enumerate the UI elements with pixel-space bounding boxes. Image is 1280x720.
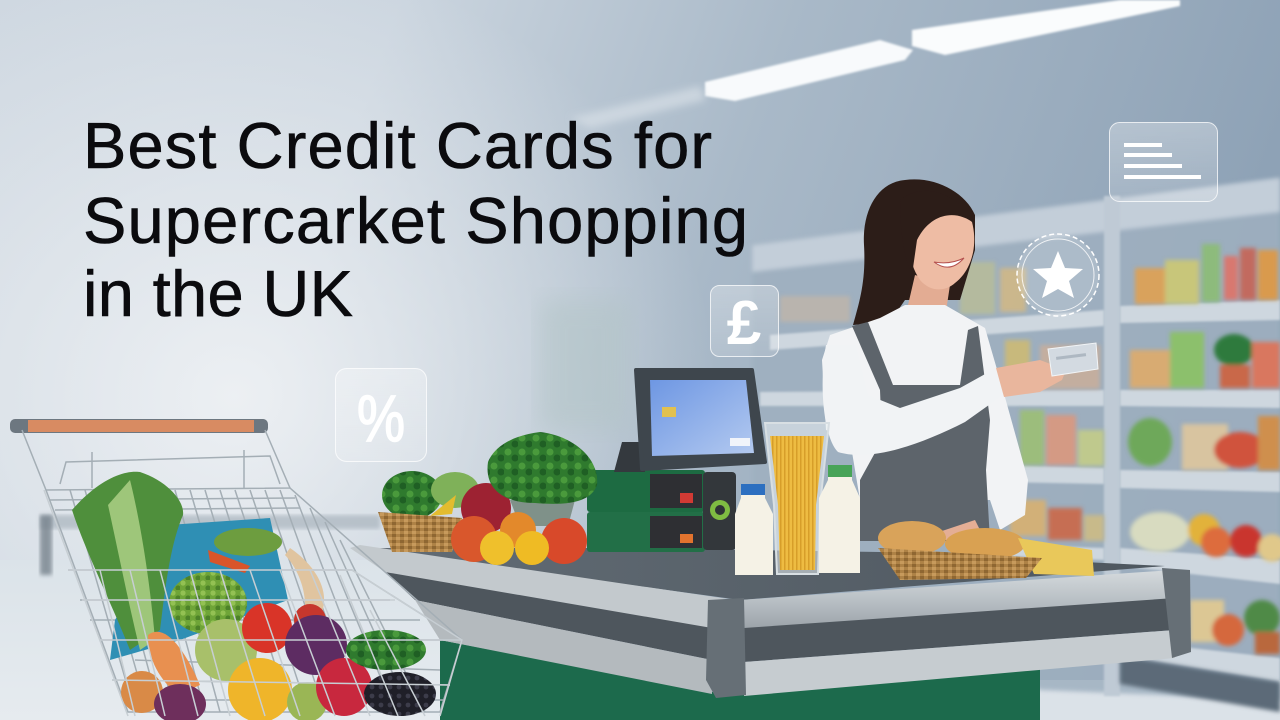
fringe: [900, 191, 975, 275]
icon: star seal: [1017, 234, 1099, 316]
hand: [996, 360, 1066, 397]
yellow pepper: [228, 658, 292, 720]
cart wire frame: [22, 430, 462, 712]
woman cashier: [822, 179, 1066, 541]
ceiling lights: [570, 0, 1180, 128]
icon: document lines badge: [1110, 122, 1218, 202]
title: Best Credit Cards for: [83, 109, 712, 182]
peppers and carrots: [214, 528, 282, 556]
tomatoes and peppers: [451, 516, 497, 562]
shelf boards: [760, 300, 1280, 682]
greens: [72, 472, 183, 650]
cart handle: [10, 419, 268, 433]
milk bottles and pasta jar: [735, 423, 860, 575]
reader base: [587, 470, 705, 512]
carrots and onion: [148, 632, 200, 695]
counter green base: [440, 640, 1040, 720]
credit card in hand: [1048, 343, 1098, 376]
title: Supercarket Shopping: [83, 184, 748, 257]
hands on counter: [936, 520, 985, 540]
corner bumpers: [706, 598, 746, 698]
shopping cart: [10, 419, 462, 720]
icon: percent badge: %: [357, 381, 405, 455]
blue bag: [110, 518, 288, 660]
icon: pound badge: £: [727, 289, 761, 358]
reaching arm sleeve: [823, 345, 1003, 455]
left rail: [350, 545, 735, 630]
basket of vegetables: [382, 471, 442, 519]
face: [910, 213, 974, 289]
bread basket: [878, 521, 1094, 580]
herbs and berries: [346, 630, 426, 670]
shelving unit: [752, 178, 1280, 712]
icon: pound badge: [710, 286, 778, 358]
radicchio: [285, 615, 347, 675]
produce on counter: [378, 432, 597, 565]
card payment terminal: [587, 370, 765, 552]
shelf products: [780, 244, 1280, 654]
shirt: [822, 305, 1028, 530]
hair: [853, 179, 975, 325]
title: in the UK: [83, 257, 353, 330]
checkout counter: [350, 545, 1191, 720]
neck: [905, 275, 950, 318]
apron: [852, 322, 990, 541]
title: [83, 109, 748, 330]
front rail: [740, 570, 1175, 630]
cart front wires: [44, 490, 462, 716]
pot under herb: [510, 500, 575, 526]
screen: [614, 442, 645, 472]
plinth: [1120, 656, 1280, 712]
potted herb: [488, 432, 597, 504]
counter top: [360, 548, 1165, 600]
romanesco: [169, 572, 247, 634]
icon: percent badge: [336, 368, 426, 462]
apple and tomatoes: [195, 619, 257, 681]
red pepper: [316, 658, 372, 716]
smile: [934, 258, 964, 267]
